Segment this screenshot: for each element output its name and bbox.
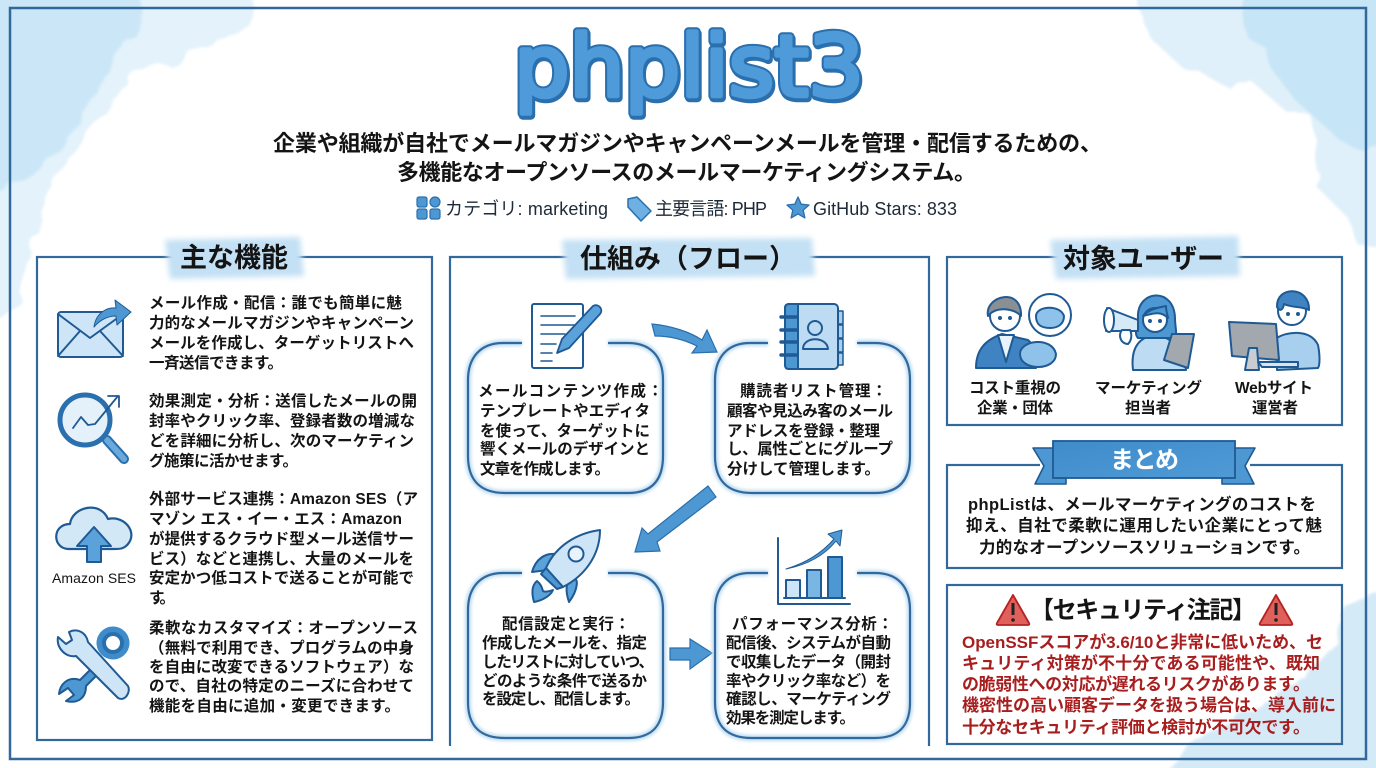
icon: warning right: [1260, 595, 1292, 625]
label: cost conscious: コスト重視の: [969, 379, 1061, 397]
stars label: GitHub Stars: 833: [813, 199, 957, 219]
step 2 text: [727, 381, 893, 478]
feature 2 text: [149, 391, 417, 470]
label: cost conscious: 企業・団体: [977, 398, 1053, 417]
step 1 text: 響くメールのデザインと: [480, 439, 650, 458]
summary text: phpListは、メールマーケティングのコストを: [968, 494, 1316, 514]
warning text: キュリティ対策が不十分である可能性や、既知: [962, 653, 1320, 673]
summary text: [966, 494, 1322, 557]
step 4 text: 確認し、マーケティング: [726, 689, 891, 708]
feature 3 text: す。: [149, 589, 175, 607]
icon: tag: [628, 197, 651, 221]
step 2 text: し、属性ごとにグループ: [727, 439, 893, 458]
step 2 text: 顧客や見込み客のメール: [727, 402, 893, 420]
warning text: 機密性の高い顧客データを扱う場合は、導入前に: [962, 695, 1336, 715]
step 3 text: [482, 615, 654, 708]
label: marketing staff: [1095, 378, 1202, 417]
label: website operator: Webサイト: [1235, 379, 1313, 397]
arrow: step 2 to 3: [635, 486, 716, 552]
feature 1 text: 力的なメールマガジンやキャンペーン: [149, 314, 414, 332]
step 2 text: 分けして管理します。: [727, 459, 880, 478]
summary text: 抑え、自社で柔軟に運用したい企業にとって魅: [966, 515, 1322, 535]
step 1 text: メールコンテンツ作成：: [478, 381, 663, 400]
users heading: 対象ユーザー: [1063, 244, 1224, 274]
summary ribbon: [1033, 441, 1255, 485]
feature 3 text: ビス）などと連携し、大量のメールを: [149, 549, 414, 568]
warning text: [962, 632, 1336, 737]
subtitle: 企業や組織が自社でメールマガジンやキャンペーンメールを管理・配信するための、: [273, 131, 1102, 156]
step 2 text: アドレスを登録・整理: [727, 421, 880, 440]
panel: summary: [947, 441, 1342, 568]
step 4 text: で収集したデータ（開封: [726, 652, 891, 671]
icon: marketer with megaphone: [1104, 295, 1194, 370]
label: website operator: 運営者: [1252, 398, 1298, 417]
summary text: 力的なオープンソースソリューションです。: [979, 538, 1310, 557]
subtitle: 多機能なオープンソースのメールマーケティングシステム。: [397, 160, 976, 185]
feature 1 text: [149, 293, 414, 372]
panel: features: [37, 237, 432, 740]
icon: wrench and gear: [58, 630, 129, 702]
feature 4 text: ので、自社の特定のニーズに合わせて: [149, 676, 414, 695]
title: phplist3: [514, 18, 864, 117]
arrow: step 3 to 4: [670, 639, 712, 669]
step 3 text: 作成したメールを、指定: [482, 633, 647, 652]
background watercolor wash: top right: [1140, 0, 1376, 245]
background watercolor wash: top left: [0, 0, 255, 330]
feature 1 text: 一斉送信できます。: [149, 354, 283, 372]
subtitle: [273, 131, 1102, 185]
step 3 text: を設定し、配信します。: [482, 690, 640, 708]
icon: magnifier with chart: [60, 395, 124, 459]
feature 4 text: 機能を自由に追加・変更できます。: [149, 696, 400, 715]
flow step 3 box: [468, 573, 663, 738]
icon: category grid: [417, 197, 440, 219]
icon: address book: [781, 304, 843, 369]
step 4 text: 配信後、システムが自動: [726, 633, 891, 652]
flow step 4 box: [715, 573, 910, 738]
step 3 text: 配信設定と実行：: [502, 615, 630, 633]
feature 3 text: 外部サービス連携：Amazon SES（ア: [149, 489, 418, 508]
flow step 2 box: [715, 343, 910, 493]
step 4 text: 率やクリック率など）を: [726, 672, 891, 690]
warning text: 十分なセキュリティ評価と検討が不可欠です。: [962, 717, 1310, 737]
category label: カテゴリ: marketing: [445, 199, 608, 219]
label: marketing staff: マーケティング: [1095, 378, 1202, 397]
feature 3 text: 安定かつ低コストで送ることが可能で: [149, 568, 414, 587]
icon: warning left: [997, 595, 1029, 625]
features heading: 主な機能: [180, 243, 288, 273]
feature 1 text: メール作成・配信：誰でも簡単に魅: [149, 293, 402, 312]
feature 2 text: グ施策に活かせます。: [149, 451, 298, 470]
cloud label: Amazon SES: [52, 570, 136, 586]
icon: cloud upload: [56, 508, 131, 562]
feature 3 text: [149, 489, 418, 607]
title: phplist3: [515, 20, 865, 119]
feature 4 text: （無料で利用でき、プログラムの中身: [149, 638, 414, 657]
title: phplist3: [514, 18, 864, 117]
panel: flow: [450, 238, 929, 746]
language label: 主要言語: PHP: [655, 199, 767, 219]
step 4 text: [726, 614, 893, 727]
heading: 【セキュリティ注記】: [1030, 597, 1256, 624]
icon: envelope with arrow: [58, 300, 131, 357]
feature 4 text: [149, 618, 418, 715]
warning text: OpenSSFスコアが3.6/10と非常に低いため、セ: [962, 632, 1323, 652]
arrow: step 1 to 2: [652, 324, 717, 353]
step 2 text: 購読者リスト管理：: [740, 381, 887, 400]
step 1 text: を使って、ターゲットに: [480, 421, 650, 440]
metadata row: [417, 197, 957, 221]
icon: document and pen: [532, 304, 601, 368]
icon: growth chart: [778, 530, 850, 604]
step 1 text: [478, 381, 663, 478]
step 4 text: 効果を測定します。: [726, 709, 855, 727]
ribbon heading: まとめ: [1110, 447, 1179, 474]
panel: target users: [947, 236, 1342, 425]
flow heading wash: [562, 238, 815, 279]
icon: star: [787, 197, 809, 218]
step 1 text: 文章を作成します。: [480, 459, 610, 478]
icon: rocket: [532, 530, 600, 602]
users heading wash: [1050, 236, 1240, 279]
label: marketing staff: 担当者: [1125, 399, 1171, 417]
icon: business person with piggy bank: [976, 294, 1071, 368]
feature 2 text: 効果測定・分析：送信したメールの開: [149, 391, 417, 410]
feature 3 text: が提供するクラウド型メール送信サー: [149, 529, 414, 548]
feature 3 text: マゾン エス・イー・エス：Amazon: [149, 510, 402, 528]
features heading wash: [165, 237, 304, 279]
label: cost conscious: [969, 379, 1061, 417]
warning text: の脆弱性への対応が遅れるリスクがあります。: [962, 674, 1310, 694]
background watercolor wash: bottom right: [1160, 590, 1376, 768]
feature 4 text: 柔軟なカスタマイズ：オープンソース: [149, 618, 418, 637]
feature 4 text: を自由に改変できるソフトウェア）な: [149, 657, 414, 676]
feature 1 text: メールを作成し、ターゲットリストへ: [149, 333, 414, 352]
step 1 text: テンプレートやエディタ: [480, 401, 650, 420]
label: website operator: [1235, 379, 1313, 417]
feature 2 text: どを詳細に分析し、次のマーケティン: [149, 431, 414, 450]
step 3 text: どのような条件で送るか: [482, 671, 647, 690]
step 3 text: したリストに対していつ、: [482, 653, 654, 671]
feature 2 text: 封率やクリック率、登録者数の増減な: [149, 411, 415, 430]
panel: security notice: [947, 585, 1342, 744]
flow heading: 仕組み（フロー）: [580, 244, 796, 274]
flow step 1 box: [468, 343, 663, 493]
step 4 text: パフォーマンス分析：: [732, 614, 893, 633]
icon: web operator at computer: [1229, 291, 1320, 370]
